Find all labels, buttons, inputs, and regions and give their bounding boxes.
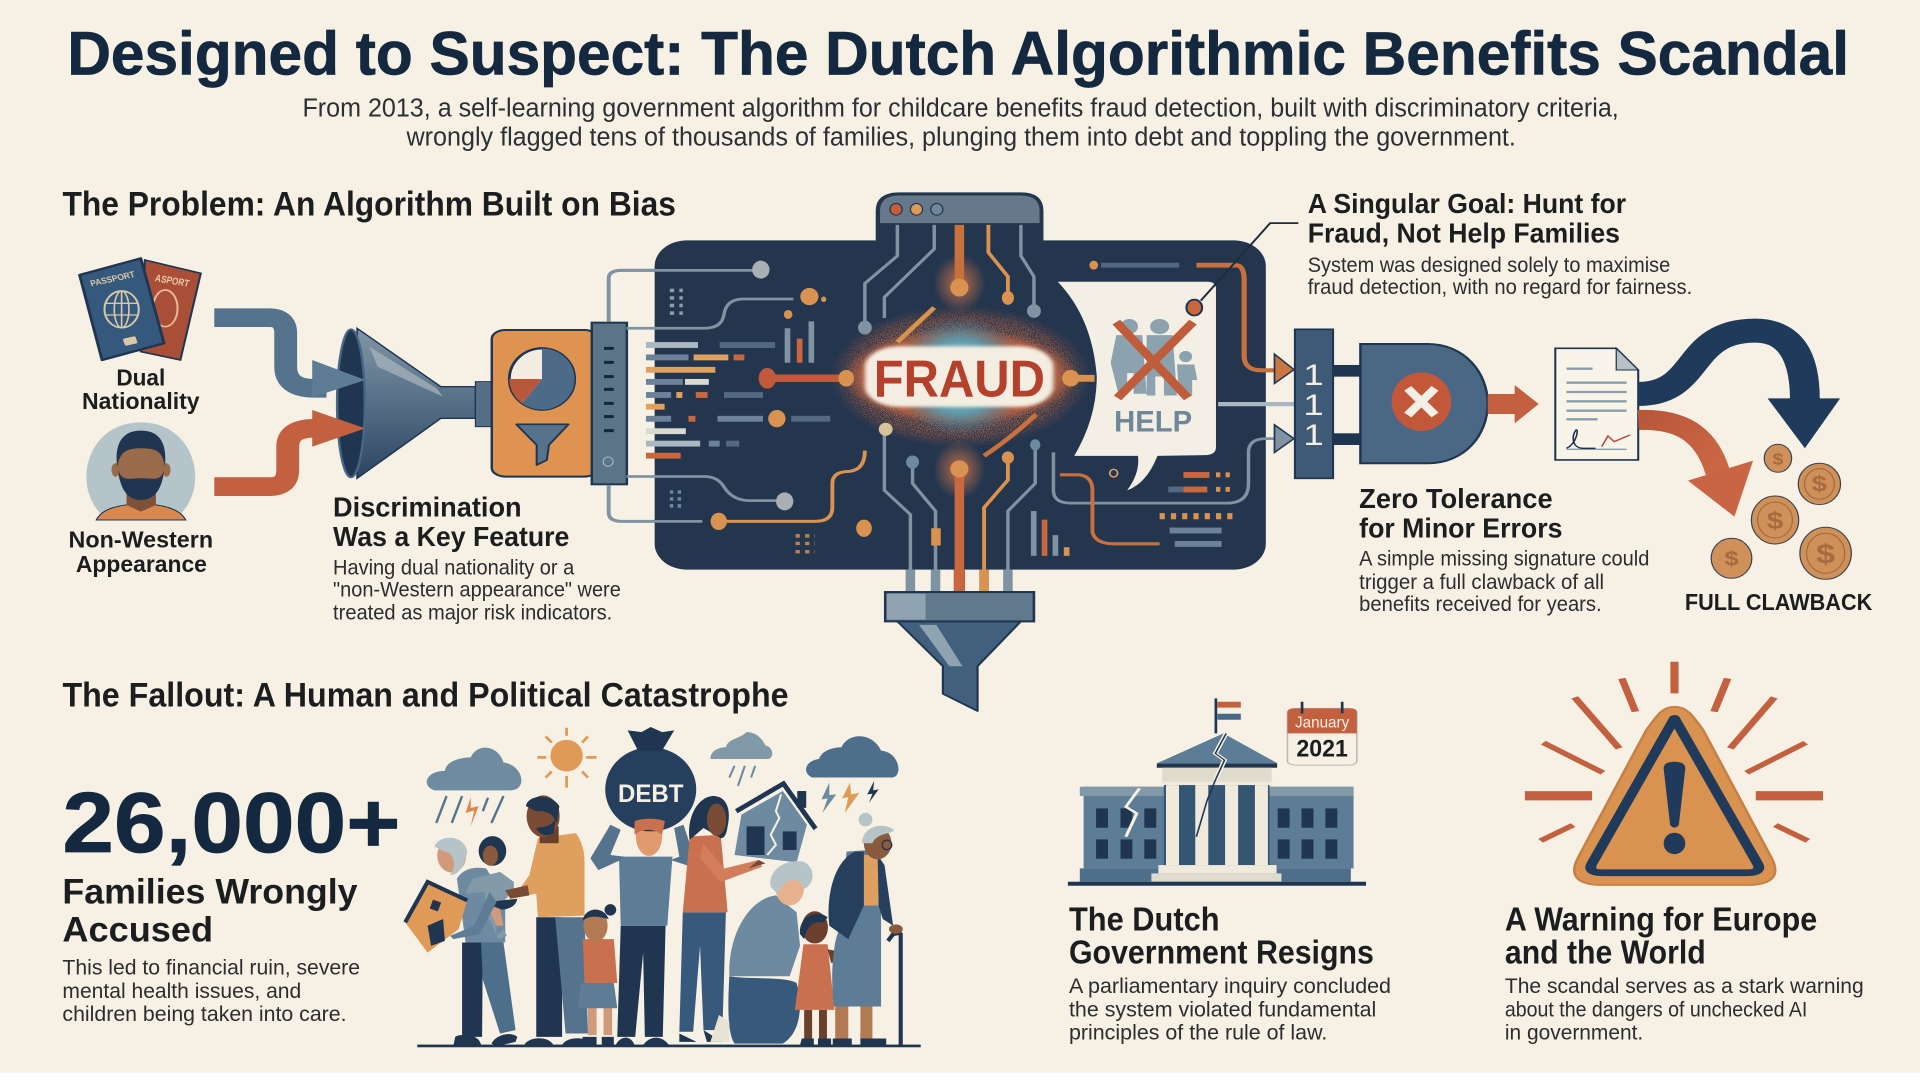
title: Designed to Suspect: The Dutch Algorithmic Benefits Scandal [67,20,1849,88]
text: discrimination: "non-Western appearance" were [333,578,621,601]
glow behind the fraud label [830,254,1090,499]
stat: families accused: This led to financial ruin, severe [62,957,360,980]
icon: coins: $ [1812,473,1827,497]
text: singular goal callout: A Singular Goal: Hunt for [1308,188,1626,219]
text: warning: The scandal serves as a stark warning [1505,975,1864,998]
icon: coins: $ [1767,506,1783,534]
icon: sun [537,728,597,788]
code bars [646,263,1235,556]
text: warning: about the dangers of unchecked AI [1505,998,1807,1021]
text: government resigns: the system violated fundamental [1069,998,1376,1021]
text: discrimination: treated as major risk indicators. [333,602,612,625]
icon: debt bag [605,727,696,831]
icon: output funnel [885,592,1034,711]
callout leader line [1201,223,1298,301]
icon: small cloud [710,732,772,786]
text: government resigns: A parliamentary inquiry concluded [1069,975,1391,998]
arrow: appearance input [214,410,365,487]
icon: calendar January 2021: January [1295,714,1350,731]
figure: man carrying debt bag [590,727,697,1045]
heading: the problem: The Problem: An Algorithm Built on Bias [62,186,676,224]
text: input labels: Non-Western [69,526,213,552]
icon: coins [1711,444,1851,579]
icon: rain cloud [427,748,521,826]
text: zero tolerance [1359,483,1649,616]
icon: coins: $ [1724,547,1739,570]
board [655,240,1266,570]
subtitle [302,94,1619,152]
text: singular goal callout: Fraud, Not Help Families [1308,217,1620,248]
arrow: output to gate [1274,354,1294,452]
icon: clamp connector [592,323,627,484]
text: government resigns: The Dutch [1069,902,1220,939]
text: zero tolerance: for Minor Errors [1359,513,1562,544]
panel: algorithm circuit board [609,193,1298,711]
icon: storm cloud [806,736,898,813]
help speech bubble: HELP [1114,406,1192,439]
figure: woman with broken house [679,784,816,1042]
stat: families accused: children being taken into care. [62,1003,347,1026]
text: input labels [69,365,213,577]
text: warning: in government. [1505,1022,1643,1045]
icon: risk scoring box [492,330,598,477]
arrow: to document [1488,385,1539,423]
icon: passports: ASPORT [154,273,191,290]
icon: warning triangle [1525,662,1823,885]
figure: father [505,795,593,1045]
icon: non-western appearance [86,422,195,520]
text: government resigns: Government Resigns [1069,935,1374,972]
text: warning: A Warning for Europe [1505,902,1817,939]
label: full clawback: FULL CLAWBACK [1685,589,1872,615]
text: singular goal callout: fraud detection, with no regard for fairness. [1308,276,1692,299]
panel: biased inputs [80,258,627,520]
stat: families accused [62,775,400,1026]
icon: logic gate: 1 [1303,419,1324,452]
stat: families accused: Families Wrongly [62,872,358,912]
warning inner outline [1591,718,1759,873]
panel: government resigns icon [1068,698,1366,886]
exclamation mark [1664,762,1685,854]
icon: calendar January 2021 [1287,702,1357,765]
icon: cracked house [735,784,816,862]
warning rays [1525,662,1823,841]
fraud label: FRAUD [874,351,1045,408]
figure: child in dress [795,911,855,1045]
icon: calendar January 2021: 2021 [1296,735,1348,762]
text: discrimination: Discrimination [333,492,522,523]
text: singular goal callout: System was designed solely to maximise [1308,254,1670,277]
icon: coins: $ [1816,538,1835,570]
text: zero tolerance: benefits received for years. [1359,593,1602,616]
illustration: affected families [405,727,921,1047]
circuit traces: grey [626,225,1294,592]
icon: signed document [1555,348,1638,460]
figure: kneeling grandmother [710,861,813,1044]
text: singular goal callout [1308,188,1692,299]
subtitle: From 2013, a self-learning government algorithm for childcare benefits fraud detection, built with discriminatory criteria, [302,94,1619,122]
icon: intake funnel [337,328,492,478]
text: discrimination [333,492,621,625]
heading: the fallout: The Fallout: A Human and Political Catastrophe [62,677,789,715]
stat: families accused: mental health issues, and [62,980,301,1003]
icon: logic gate: 1 [1303,389,1324,422]
stat: families accused: 26,000+ [62,775,400,871]
panel: zero tolerance process [1295,329,1851,579]
output wires below board [910,570,1008,592]
arrow: dark curve to coins [1638,331,1840,448]
warning triangle body [1574,707,1775,885]
text: government resigns: principles of the rule of law. [1069,1022,1327,1045]
text: discrimination: Having dual nationality or a [333,556,575,579]
icon: coins: $ [1773,450,1784,468]
text: zero tolerance: A simple missing signature could [1359,548,1649,571]
subtitle: wrongly flagged tens of thousands of families, plunging them into debt and toppling the government. [406,124,1516,152]
icon: browser tab [877,193,1043,244]
pipes to clamp [609,270,761,521]
text: warning [1505,902,1864,1045]
text: zero tolerance: Zero Tolerance [1359,483,1553,514]
stat: families accused: Accused [62,910,213,950]
icon: passports [80,258,201,360]
help speech bubble [1058,282,1216,490]
text: input labels: Nationality [82,388,200,414]
ground line [417,1045,921,1047]
text: discrimination: Was a Key Feature [333,521,569,552]
arrow: red curve to coins [1638,420,1753,517]
circuit traces: orange [719,225,1277,592]
icon: parliament building [1068,733,1366,886]
icon: debt bag: DEBT [618,780,684,808]
text: government resigns [1069,902,1391,1045]
text: zero tolerance: trigger a full clawback of all [1359,571,1604,594]
figure: elder with cane [828,813,903,1045]
circuit nodes [711,225,1098,592]
text: warning: and the World [1505,935,1706,972]
icon: logic gate: 1 [1303,359,1324,392]
icon: passports: PASSPORT [89,270,136,289]
arrow: nationality input [214,318,365,397]
figure: grandfather with child and house [405,836,517,1046]
icon: flag [1216,698,1241,733]
figure: girl [578,904,617,1045]
text: input labels: Dual [116,365,165,391]
text: input labels: Appearance [76,551,207,577]
icon: logic gate [1295,329,1488,478]
